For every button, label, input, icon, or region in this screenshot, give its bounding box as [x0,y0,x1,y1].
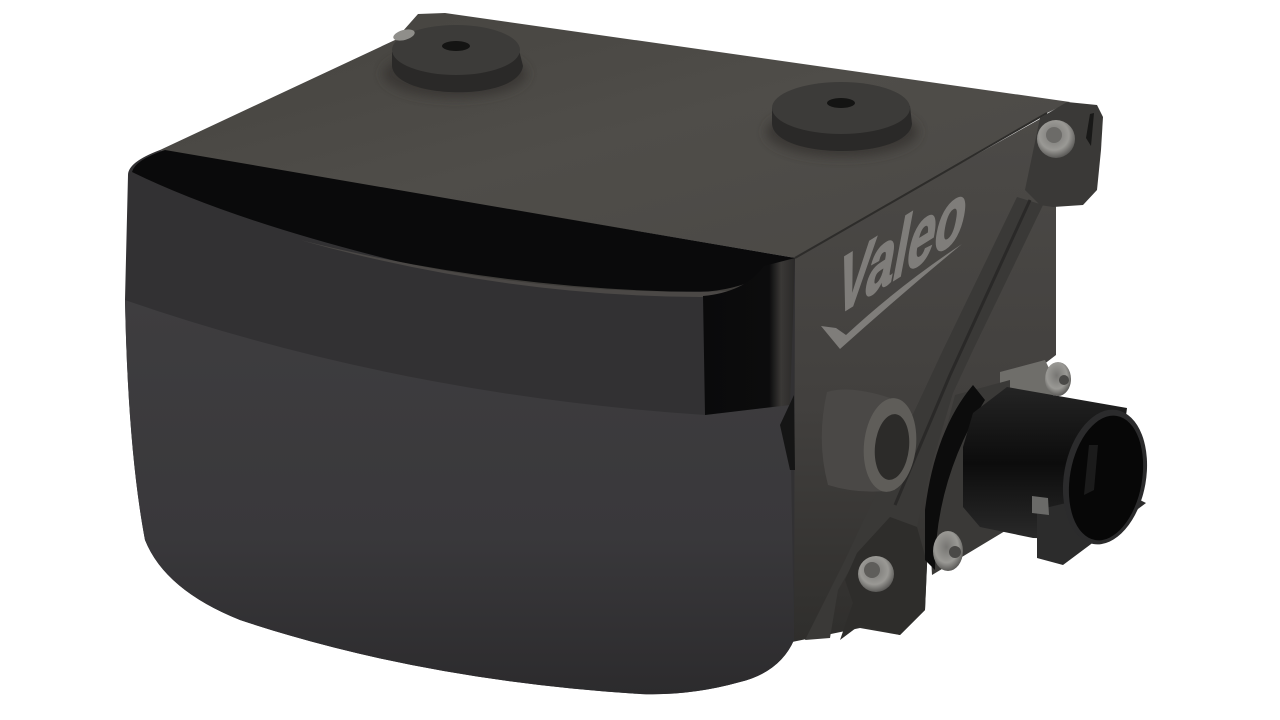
side housing [792,102,1157,642]
tab [1037,490,1146,565]
strap upper bracket [1025,102,1103,207]
lens lower band [125,300,794,694]
diagonal strap [805,197,1043,640]
right notch [780,395,795,470]
connector [925,360,1157,575]
gloss highlight [300,240,790,297]
strap lower bracket [840,517,927,640]
port [822,390,921,494]
lens upper band [125,150,795,694]
screws [858,120,1075,592]
mouth [1053,403,1157,551]
gap behind connector [925,385,985,570]
body [963,387,1127,540]
gloss right edge [703,258,795,415]
flange [928,380,1010,575]
logo: Valeo: Valeo [829,159,976,337]
icon: rubber mount right [766,82,918,157]
logo: Valeo [821,159,976,349]
icon: top screw [392,27,416,43]
silver plate [1000,360,1062,395]
front lens [125,150,795,694]
icon: rubber mount left [383,25,527,98]
top plate [160,13,1070,258]
gloss upper band [132,150,795,292]
